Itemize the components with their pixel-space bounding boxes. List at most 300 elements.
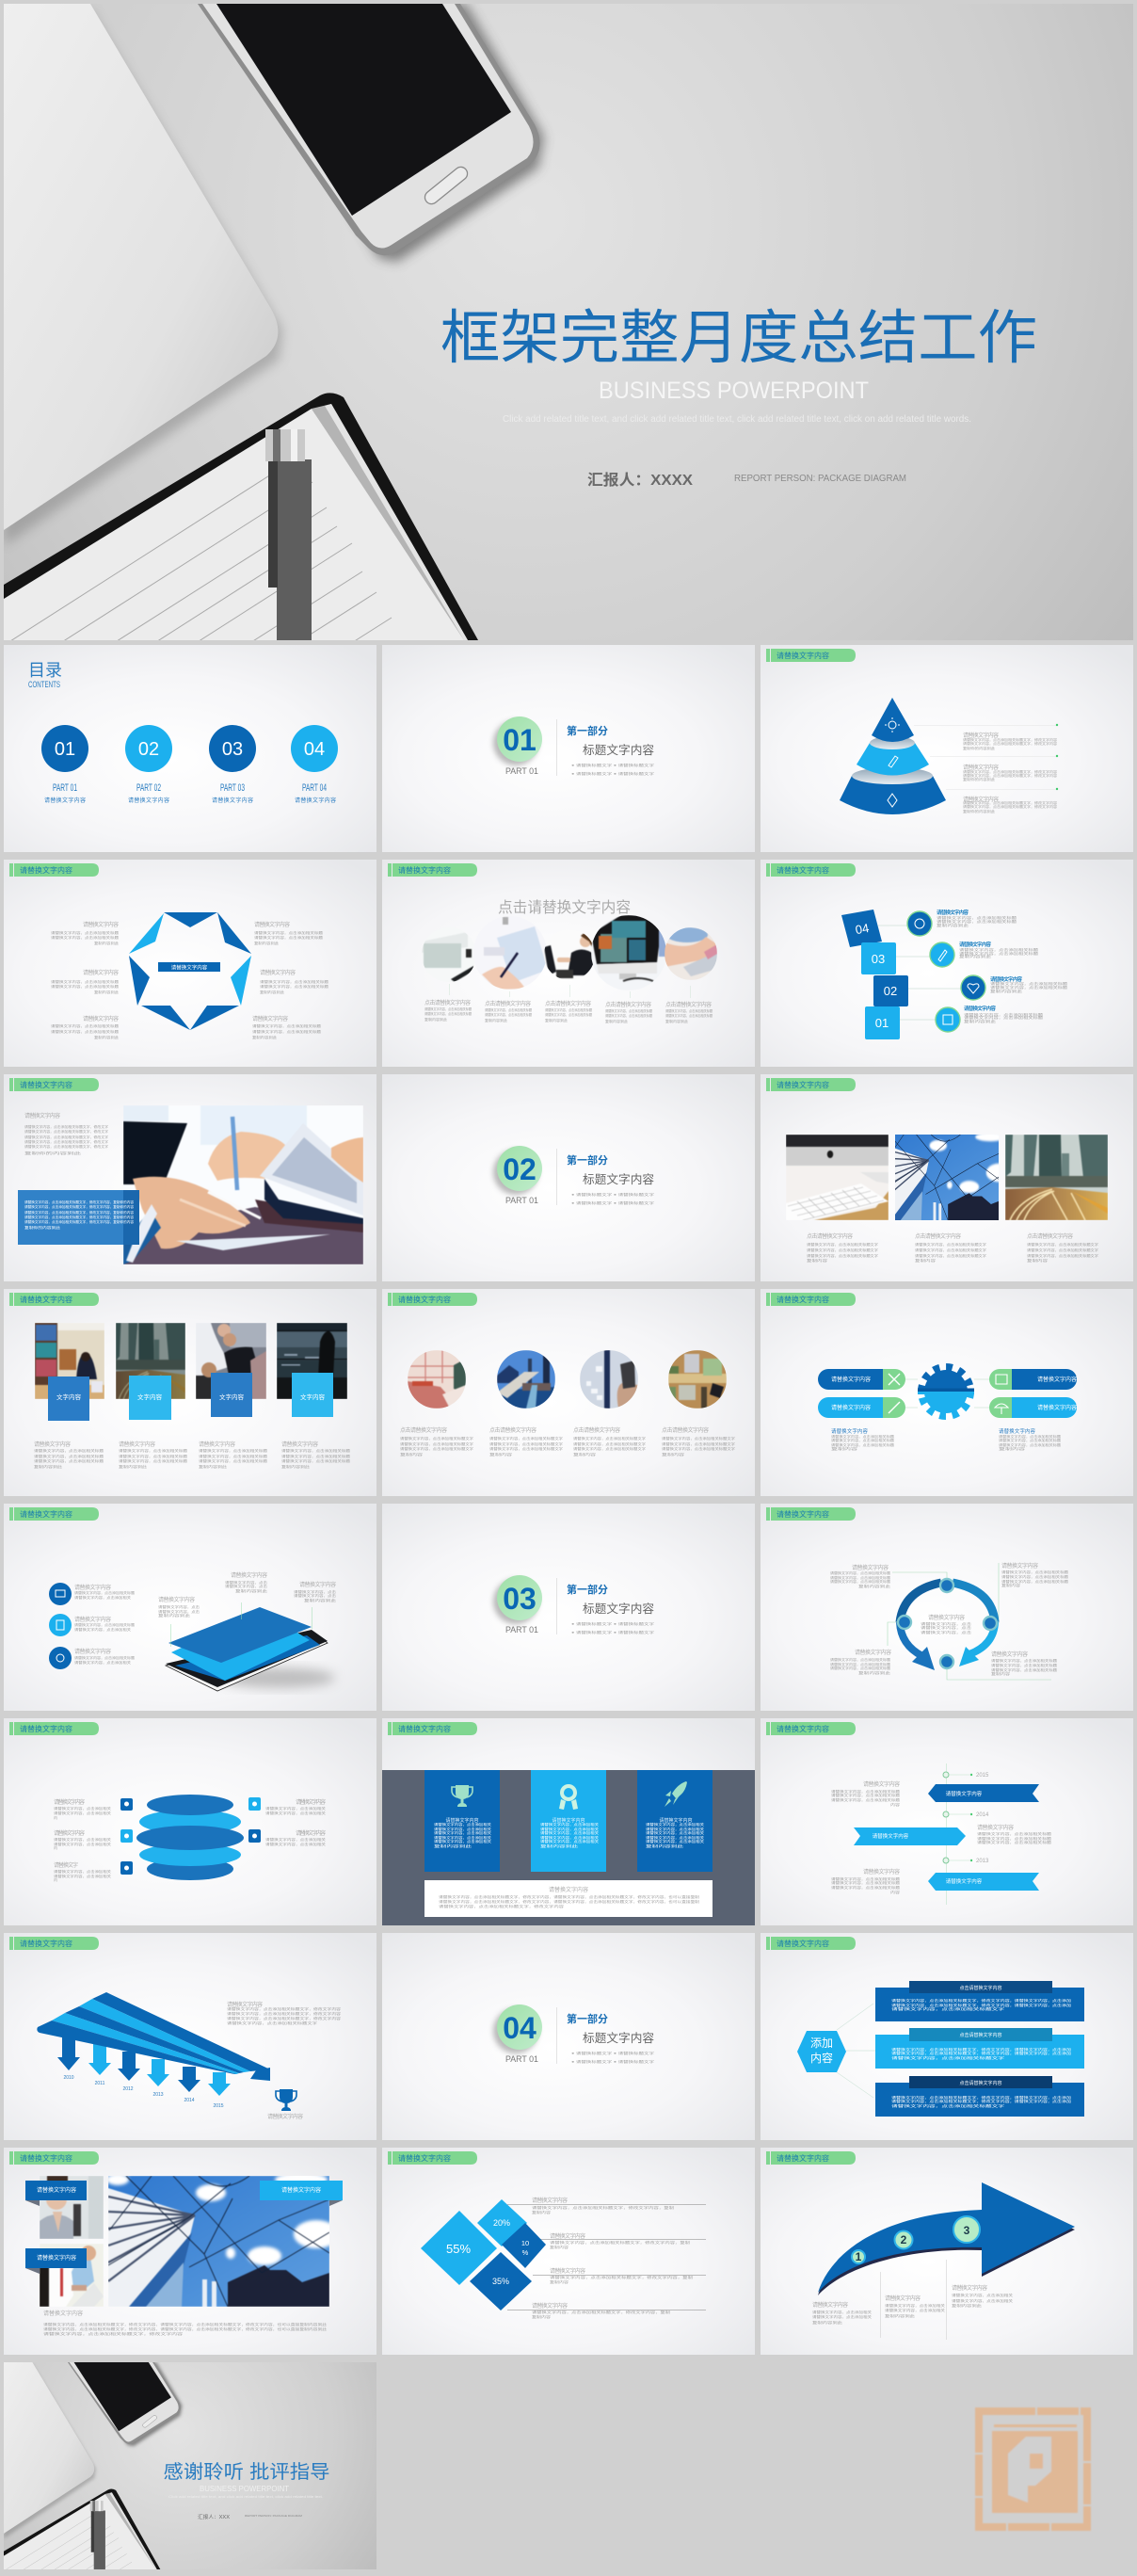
left text blocks — [54, 1798, 111, 1882]
part circles: 03 — [222, 739, 243, 760]
connectors — [905, 1379, 989, 1408]
column 2: 请替换文字内容，点击添加相关 — [540, 1830, 599, 1835]
right pills — [989, 1369, 1077, 1418]
subtitle: BUSINESS POWERPOINT — [599, 378, 869, 404]
text blocks — [812, 2284, 1014, 2325]
ribbons: 请替换文字内容 — [873, 1832, 909, 1840]
text blocks: 复制内容到此 — [990, 989, 1023, 993]
tag: 请替换文字内容 — [777, 1939, 829, 1948]
part label: PART 01 — [505, 2054, 538, 2064]
panel: phone layers — [4, 1504, 376, 1711]
diamonds — [421, 2199, 546, 2310]
text block: 请替换文字内容，点击添加相关标题文字，修改文字内容 — [43, 2331, 184, 2336]
right icon tiles — [248, 1797, 261, 1843]
tag: 请替换文字内容 — [20, 1939, 72, 1948]
connector lines — [878, 926, 973, 1020]
text blocks: 请替换文字内容，点击添加相关标题 — [485, 1012, 532, 1017]
right text blocks: 请替换文字内容，点击添加相关标题 — [260, 984, 329, 989]
section subtitle: 标题文字内容 — [583, 1602, 654, 1616]
column 1: 请替换文字内容，点击添加相关 — [434, 1830, 491, 1835]
tag: 请替换文字内容 — [20, 1724, 72, 1733]
tag — [766, 1293, 856, 1306]
section notes: ● 请替换标题文字 ● 请替换标题文字 — [571, 2059, 655, 2064]
bar 3: 请替换文字内容，点击添加相关标题文字，修改文字内容，请替换文字内容，点击添加 — [891, 2095, 1072, 2100]
right text blocks: 复制内容到此 — [254, 941, 279, 945]
text blocks: 点击请替换文字内容 — [424, 999, 471, 1006]
connector lines — [449, 984, 691, 998]
left text blocks: 请替换文字内容 — [83, 1015, 119, 1022]
text blocks: 请替换文字内容，点击添加相关标题 — [424, 1011, 472, 1016]
heading: 点击请替换文字内容 — [498, 899, 631, 916]
text blocks: 请替换文字内容 — [199, 1441, 235, 1448]
text blocks: 请替换文字内容，点击添加相关标题 — [119, 1448, 188, 1453]
column 3: 复制内容到此 — [646, 1843, 684, 1848]
panel: three photos — [761, 1074, 1133, 1281]
blue overlay box: 请替换文字内容，点击添加相关标题文字，修改文字内容，复制你的内容 — [24, 1199, 134, 1204]
section notes — [571, 1621, 655, 1634]
left text blocks: 请替换文字内容，点击添加相关标题 — [51, 984, 120, 989]
year labels: 2013 — [152, 2092, 164, 2098]
text blocks: 请替换文字内容，点击添加相关标题 — [830, 1570, 890, 1575]
upper text blocks — [158, 1571, 337, 1618]
text blocks: 点击请替换文字内容 — [915, 1232, 961, 1240]
column 2: 请替换文字内容，点击添加相关 — [540, 1822, 599, 1827]
text blocks: 请替换文字内容，点击添加相关标题 — [545, 1012, 592, 1017]
right text blocks: 请替换文字内容，点击添加相关 — [265, 1806, 327, 1811]
text blocks: 复制内容到此 — [424, 1017, 447, 1022]
right text blocks: 请替换文字内容 — [296, 1829, 326, 1837]
left text blocks: 内 — [54, 1877, 57, 1882]
text blocks: 请替换文字内容，点击添加相关标题 — [1001, 1574, 1069, 1579]
section title: 第一部分 — [567, 1153, 608, 1167]
bar 3: 点击请替换文字内容 — [959, 2080, 1002, 2086]
diamonds: 20% — [493, 2218, 510, 2228]
text blocks: 点击请替换文字内容 — [665, 1001, 712, 1008]
section notes — [571, 1192, 655, 1205]
text blocks: 请替换文字内容，点击添加相关标题 — [119, 1458, 188, 1463]
text blocks: 请替换文字内容，点击添加相关标题 — [991, 1658, 1057, 1663]
text blocks: 请替换文字内容，点击添加相关标题 — [831, 1880, 901, 1885]
year nodes: 2013 — [976, 1859, 989, 1864]
photo: glass building — [895, 1135, 999, 1220]
panel: curved arrow — [761, 2148, 1133, 2355]
photo: tablet — [665, 927, 717, 980]
column 1: 请替换文字内容，点击添加相关 — [434, 1839, 491, 1843]
text blocks: 请替换文字内容 — [34, 1441, 71, 1448]
reporter: 汇报人：XXXX — [587, 471, 693, 489]
bar 1: 点击请替换文字内容 — [959, 1985, 1002, 1991]
icon: trophy — [276, 2089, 296, 2111]
tag — [766, 1722, 856, 1735]
text blocks: 请替换文字内容 — [990, 975, 1022, 983]
section notes: ● 请替换标题文字 ● 请替换标题文字 — [571, 1192, 655, 1197]
part label: PART 01 — [505, 766, 538, 776]
text blocks: 请替换文字内容 — [928, 1614, 965, 1621]
step numbers — [856, 2224, 970, 2263]
text blocks: 复制内容到此 — [812, 2320, 843, 2325]
left text blocks: 请替换文字内容 — [74, 1616, 111, 1623]
left text blocks: 请替换文字内容，点击添加相关 — [54, 1811, 111, 1815]
loop arrows — [900, 1583, 995, 1670]
column 1: 请替换文字内容，点击添加相关 — [434, 1822, 491, 1827]
step markers — [852, 2216, 980, 2263]
year labels: 2011 — [95, 2081, 105, 2086]
panel: dark three columns — [382, 1718, 755, 1925]
text blocks: 请替换文字内容，点击添加相关标题 — [831, 1434, 894, 1439]
text block — [24, 1112, 108, 1155]
left text blocks: 请替换文字内容 — [74, 1584, 111, 1591]
white text box: 请替换文字内容，点击添加相关标题文字，修改文字内容，请替换文字内容，点击添加相关标题文字，修改文字内容，也可以直接复制 — [439, 1899, 700, 1904]
text blocks: 请替换文字内容，点击添加相关标题 — [830, 1666, 890, 1670]
text blocks: 请替换文字内容，点击添加相关标题 — [1001, 1579, 1069, 1584]
text blocks: 请替换文字内容，点击添加相关标题 — [937, 915, 1017, 920]
text blocks: 请替换文字内容，点击添加相关标题文字，修改文字内容 — [963, 769, 1057, 774]
text blocks: 请替换文字内容，点击添加相关标题文字，修改文字内容 — [963, 737, 1057, 742]
text blocks: 请替换文字内容 — [855, 1649, 891, 1656]
panel: handshake photo with text — [4, 1074, 376, 1281]
tag: 请替换文字内容 — [777, 1295, 829, 1304]
down arrows — [57, 2037, 231, 2096]
text blocks: 请替换文字内容，点击添加相关标题文字，修改文字内容，复制 — [550, 2275, 694, 2279]
text blocks: 内容 — [890, 1890, 901, 1894]
text blocks: 请替换文字内容，点击添加相关 — [952, 2293, 1014, 2297]
text blocks: 复制内容 — [489, 1452, 513, 1457]
text block: 请替换文字内容 — [43, 2310, 83, 2317]
upper text blocks: 请替换文字内容，点击 — [225, 1580, 268, 1585]
text blocks: 请替换文字内容 — [937, 909, 969, 916]
right text blocks: 请替换文字内容，点击添加相关 — [265, 1837, 327, 1842]
text blocks: 请替换文字内容 — [977, 1824, 1014, 1831]
closing description: Click add related title text, and click add related title text, click add related title text. — [168, 2495, 323, 2499]
section notes: ● 请替换标题文字 ● 请替换标题文字 — [571, 763, 655, 767]
part captions: 请替换文字内容 — [128, 797, 169, 804]
white text box — [424, 1880, 713, 1917]
text blocks: 复制内容 — [400, 1452, 424, 1457]
text blocks: 请替换文字内容，点击添加相关标题 — [990, 985, 1068, 990]
text blocks: 点击请替换文字内容 — [400, 1426, 447, 1434]
labels: 请替换文字内容 — [37, 2186, 76, 2194]
tag — [388, 1722, 477, 1735]
text blocks: 请替换文字内容，点击添加相关标题 — [831, 1793, 901, 1797]
left text blocks: 请替换文字内容 — [83, 921, 119, 928]
text block: 复制你的内容到此 — [24, 1151, 82, 1155]
blue overlay box: 请替换文字内容，点击添加相关标题文字，修改文字内容，复制你的内容 — [24, 1204, 134, 1209]
text blocks: 请替换文字内容 — [963, 732, 999, 739]
text blocks: 请替换文字内容，点击添加相关标题文字 — [662, 1446, 735, 1451]
text blocks: 请替换文字内容，点击添加相关标题文字，修改文字内容 — [963, 741, 1057, 746]
closing photo — [3, 2362, 376, 2576]
part captions: 请替换文字内容 — [212, 797, 253, 804]
text blocks: 请替换文字内容，点击添加相关标题 — [977, 1831, 1052, 1836]
part labels: PART 04 — [302, 782, 327, 794]
icon: rocket — [665, 1781, 687, 1807]
labels: 请替换文字内容 — [37, 2254, 76, 2262]
text blocks: 复制内容 — [532, 2314, 552, 2319]
left text blocks: 请替换文字内容 — [54, 1829, 85, 1837]
right text blocks — [252, 921, 329, 1039]
year labels: 2015 — [213, 2103, 224, 2109]
photo: city road — [116, 1323, 185, 1399]
overlay boxes — [48, 1373, 333, 1421]
text blocks: 请替换文字内容，点击添加相关标题 — [281, 1448, 351, 1453]
left text blocks — [51, 921, 120, 1039]
text blocks: 复制内容 — [831, 1446, 858, 1451]
diamonds: 35% — [492, 2277, 509, 2286]
section notes — [571, 763, 655, 776]
trophy caption: 请替换文字内容 — [267, 2113, 303, 2120]
text blocks: 请替换文字内容，点击添加相关标题 — [977, 1840, 1052, 1844]
text blocks: 请替换文字内容，点击添加相关标题文字 — [400, 1436, 473, 1441]
text blocks: 请替换文字内容，点击 — [921, 1621, 972, 1626]
icon circles — [49, 1583, 72, 1669]
blue overlay box — [18, 1190, 139, 1245]
photo: businesswoman — [544, 933, 593, 979]
tag — [388, 863, 477, 877]
photo: business team — [196, 1323, 266, 1399]
upper text blocks: 请替换文字内容，点击 — [294, 1593, 337, 1598]
left text blocks: 请替换文字内容，点击添加相关 — [54, 1842, 111, 1846]
text blocks: 请替换文字内容，点击添加相关标题文字，修改文字内容，复制 — [532, 2310, 671, 2314]
column 3: 请替换文字内容 — [659, 1817, 693, 1824]
text block: 请替换文字内容，点击添加相关标题文字，修改文字内容，请替换文字内容，点击添加相关标题文字，修改文字内容，也可以直接复制内容到此 — [43, 2326, 328, 2331]
text blocks — [831, 1780, 1052, 1894]
tag — [766, 1507, 856, 1521]
photo: hands over documents — [123, 1105, 363, 1264]
column 2: 请替换文字内容，点击添加相关 — [540, 1839, 599, 1843]
section notes: ● 请替换标题文字 ● 请替换标题文字 — [571, 2051, 655, 2055]
diamonds: % — [522, 2248, 529, 2257]
badge 01: 01 — [503, 723, 536, 757]
hexagon: 添加 — [810, 2037, 833, 2050]
column 2: 请替换文字内容，点击添加相关 — [540, 1835, 599, 1840]
section notes: ● 请替换标题文字 ● 请替换标题文字 — [571, 1621, 655, 1626]
stacked ellipses — [136, 1795, 244, 1880]
text blocks: 请替换文字内容，点击添加相关标题 — [281, 1458, 351, 1463]
tag: 请替换文字内容 — [398, 1724, 451, 1733]
part circles: 04 — [304, 739, 325, 760]
step blocks: 02 — [884, 984, 897, 998]
text block: 请替换文字内容，点击添加相关标题文字，修改文字内容 — [227, 2006, 342, 2011]
text blocks — [532, 2197, 694, 2319]
connector lines — [837, 2004, 875, 2098]
heading: 目录 — [28, 661, 62, 680]
section subtitle: 标题文字内容 — [583, 743, 654, 757]
photo: smiling woman — [40, 2176, 104, 2239]
text blocks: 请替换文字内容 — [812, 2301, 848, 2309]
column 3: 请替换文字内容，点击添加相关 — [646, 1830, 704, 1835]
text blocks: 复制内容到此 — [952, 2303, 983, 2308]
panel: diamond percentages — [382, 2148, 755, 2355]
tag: 请替换文字内容 — [20, 1295, 72, 1304]
text blocks: 请替换文字内容，点击添加相关标题 — [990, 981, 1068, 986]
tag: 请替换文字内容 — [20, 1080, 72, 1089]
left text blocks: 请替换文字内容，点击添加相关标题 — [51, 1023, 120, 1028]
section notes — [571, 2051, 655, 2064]
text blocks: 请替换文字内容，点击添加相关标题文字 — [573, 1441, 646, 1446]
text blocks: 复制内容到此 — [34, 1464, 63, 1469]
left text blocks: 复制内容到此 — [94, 990, 119, 994]
cone diagram — [840, 698, 946, 814]
photo circle: red meeting room — [408, 1350, 466, 1409]
panel: star diagram — [4, 860, 376, 1067]
section subtitle: 标题文字内容 — [583, 1172, 654, 1186]
text blocks: 请替换文字内容 — [852, 1564, 889, 1571]
photo: night skyline — [277, 1323, 347, 1399]
upper text blocks: 请替换文字内容，点击 — [158, 1609, 200, 1614]
text blocks: 点击请替换文字内容 — [662, 1426, 709, 1434]
right text blocks: 复制内容到此 — [252, 1035, 277, 1039]
text blocks: 复制内容到此 — [885, 2313, 916, 2318]
left text blocks: 请替换文字内容，点击添加相关 — [54, 1837, 111, 1842]
column 2: 请替换文字内容 — [552, 1817, 585, 1824]
text blocks: 请替换文字内容，点击添加相关标题文字 — [1027, 1253, 1098, 1258]
text blocks: 请替换文字内容 — [959, 941, 991, 948]
panel: five circle photos — [382, 860, 755, 1067]
panel: hexagon branches — [761, 1933, 1133, 2140]
text blocks: 请替换文字内容，点击添加相关标题文字 — [573, 1436, 646, 1441]
right text blocks: 请替换文字内容，点击添加相关 — [265, 1811, 327, 1815]
text blocks — [830, 1562, 1069, 1676]
text blocks: 复制内容到此 — [964, 1019, 997, 1023]
text blocks: 请替换文字内容，点击添加相关标题 — [665, 1008, 713, 1013]
text blocks: 复制内容 — [1001, 1583, 1021, 1587]
text blocks: 复制你的内容到此 — [963, 746, 995, 750]
badge 03 — [493, 1575, 542, 1624]
right text blocks: 请替换文字内容 — [254, 921, 290, 928]
text blocks — [34, 1441, 351, 1469]
text blocks: 请替换文字内容 — [1001, 1562, 1038, 1570]
panel: section 01 — [382, 645, 755, 852]
text blocks: 复制内容 — [573, 1452, 597, 1457]
section title: 第一部分 — [567, 1583, 608, 1596]
text blocks: 点击请替换文字内容 — [485, 1000, 531, 1007]
text blocks: 请替换文字内容，点击添加相关标题文字，修改文字内容 — [963, 773, 1057, 778]
badge 03: 03 — [503, 1582, 536, 1616]
text blocks: 复制内容 — [550, 2245, 569, 2249]
text blocks: 请替换文字内容，点击添加相关标题 — [34, 1448, 104, 1453]
tag — [9, 2151, 99, 2165]
text blocks: 请替换文字内容，点击添加相关标题 — [991, 1667, 1057, 1672]
left text blocks: 请替换文字内容，点击添加相关标题 — [51, 979, 120, 984]
left pills: 请替换文字内容 — [831, 1404, 871, 1411]
tag — [9, 863, 99, 877]
part captions — [44, 797, 336, 804]
bar 2: 点击请替换文字内容 — [959, 2032, 1002, 2038]
text blocks: 复制内容到此 — [485, 1018, 507, 1022]
part label: PART 01 — [505, 1196, 538, 1205]
text blocks: 请替换文字内容，点击添加相关标题文字 — [807, 1242, 878, 1247]
text blocks: 点击请替换文字内容 — [545, 1000, 591, 1007]
part labels: PART 01 — [53, 782, 77, 794]
text blocks: 请替换文字内容，点击添加相关标题文字 — [1027, 1248, 1098, 1252]
text blocks — [831, 1427, 1061, 1451]
left text blocks: 内 — [54, 1845, 57, 1850]
badge 04: 04 — [503, 2011, 536, 2045]
text block — [227, 2001, 342, 2025]
step blocks — [841, 910, 908, 1039]
text blocks: 点击请替换文字内容 — [573, 1426, 620, 1434]
tag: 请替换文字内容 — [777, 1724, 829, 1733]
overlay boxes: 文字内容 — [219, 1393, 245, 1401]
text blocks: 请替换文字内容，点击添加相关标题文字 — [807, 1248, 878, 1252]
photo: computer and keyboard — [786, 1135, 889, 1220]
closing caption: REPORT PERSON: PACKAGE DIAGRAM — [245, 2514, 303, 2518]
text blocks: 请替换文字内容 — [532, 2197, 568, 2204]
text blocks: 请替换文字内容，点击添加相关标题 — [485, 1007, 532, 1012]
text blocks: 复制内容 — [532, 2210, 552, 2214]
column 1: 请替换文字内容 — [445, 1817, 479, 1824]
text blocks: 请替换文字内容，点击添加相关标题 — [959, 951, 1039, 956]
text blocks: 请替换文字内容，点击添加相关标题 — [831, 1797, 901, 1802]
text blocks: 请替换文字内容，点击添加相关标题 — [831, 1442, 894, 1447]
right pills: 请替换文字内容 — [1037, 1376, 1077, 1383]
text blocks: 请替换文字内容 — [963, 796, 999, 803]
ribbons — [854, 1784, 1039, 1891]
step blocks: 04 — [854, 921, 870, 937]
panel: gear diagram — [761, 1289, 1133, 1496]
panel: ribbon timeline — [761, 1718, 1133, 1925]
text blocks: 请替换文字内容，点击添加相关标题文字，修改文字内容 — [963, 804, 1057, 809]
tag — [766, 2151, 856, 2165]
arrow — [818, 2182, 1075, 2295]
blue overlay box: 请替换文字内容，点击添加相关标题文字，修改文字内容，复制你的内容 — [24, 1210, 134, 1215]
tag — [9, 1937, 99, 1950]
ribbons: 请替换文字内容 — [946, 1790, 983, 1797]
text blocks: 复制内容 — [662, 1452, 685, 1457]
photo: glass building — [108, 2176, 329, 2307]
upper text blocks: 请替换文字内容，点击 — [225, 1584, 268, 1588]
blue overlay box: 请替换文字内容，点击添加相关标题文字，修改文字内容，复制你的内容 — [24, 1219, 134, 1224]
text blocks: 复制你的内容到此 — [963, 777, 995, 781]
text blocks: 请替换文字内容，点击添加相关标题文字 — [489, 1446, 563, 1451]
text blocks: 复制内容 — [991, 1671, 1011, 1676]
left text blocks: 请替换文字内容，点击添加相关标题 — [51, 1029, 120, 1034]
text blocks: 请替换文字内容，点击添加相关标题 — [830, 1657, 890, 1662]
upper text blocks: 请替换文字内容 — [231, 1571, 267, 1579]
left text blocks: 请替换文字内容，点击添加相关标题 — [74, 1622, 135, 1627]
panel: four circular photos — [382, 1289, 755, 1496]
left text blocks: 请替换文字内容 — [74, 1648, 111, 1655]
right text blocks: 请替换文字内容，点击添加相关标题 — [254, 930, 324, 935]
overlay boxes: 文字内容 — [137, 1393, 162, 1401]
text blocks: 请替换文字内容，点击添加相关标题 — [830, 1575, 890, 1580]
upper text blocks: 请替换文字内容 — [299, 1581, 336, 1588]
text blocks — [937, 909, 1068, 1023]
tag — [766, 1937, 856, 1950]
diamonds: 55% — [446, 2242, 471, 2256]
text blocks: 请替换文字内容，点击添加相关标题 — [977, 1836, 1052, 1841]
divider lines — [507, 2204, 706, 2310]
text blocks: 复制你的内容到此 — [963, 809, 995, 813]
bar 1: 请替换文字内容，点击添加相关标题文字，修改文字内容，请替换文字内容，点击添加 — [891, 1998, 1072, 2003]
text blocks: 复制内容 — [807, 1258, 828, 1263]
text blocks: 请替换文字内容，点击添加相关标题 — [999, 1434, 1061, 1439]
title: 框架完整月度总结工作 — [440, 306, 1037, 371]
text blocks: 复制内容到此 — [665, 1019, 688, 1023]
photo circle: city bridge — [497, 1350, 555, 1409]
node circles — [898, 1579, 997, 1668]
closing reporter: 汇报人：XXX — [198, 2514, 231, 2520]
left text blocks: 请替换文字内容，点击添加相关 — [74, 1627, 131, 1632]
step numbers: 2 — [901, 2233, 907, 2246]
upper text blocks: 复制内容到此 — [235, 1588, 268, 1593]
text blocks: 请替换文字内容 — [863, 1780, 900, 1788]
text blocks: 复制内容 — [1027, 1258, 1049, 1263]
panel: striped arrow timeline — [4, 1933, 376, 2140]
text blocks — [400, 1426, 735, 1457]
tag — [9, 1293, 99, 1306]
tag: 请替换文字内容 — [20, 865, 72, 875]
